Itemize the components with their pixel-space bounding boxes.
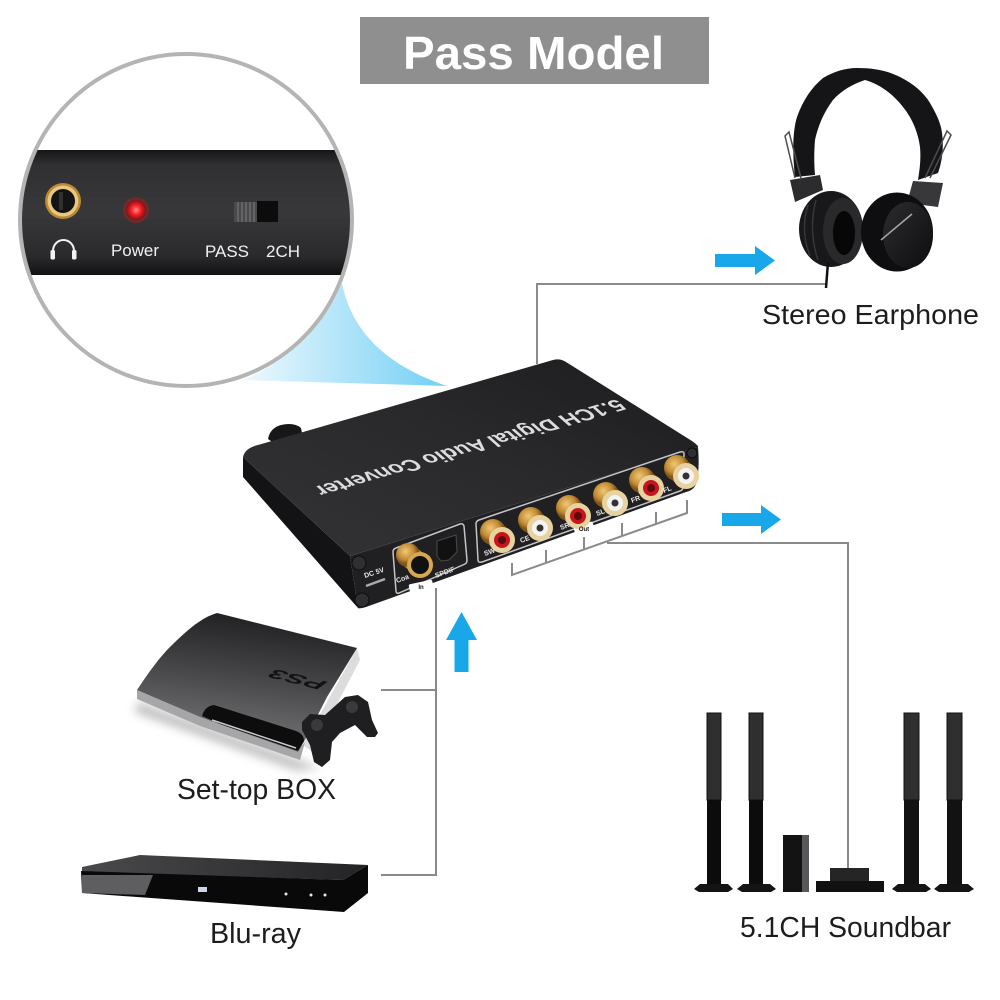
tower speaker 1	[694, 713, 733, 892]
magnified metal band	[22, 150, 350, 275]
label: Power: Power	[111, 242, 160, 260]
callout ring	[20, 54, 352, 386]
label: Set-top BOX: Set-top BOX	[177, 774, 336, 806]
console slot highlight	[212, 720, 296, 748]
device left side	[243, 457, 358, 608]
port labels	[363, 485, 673, 591]
RCA jack SL	[593, 482, 628, 516]
volume knob	[268, 424, 303, 446]
player status dots	[198, 887, 326, 896]
player front	[81, 865, 368, 912]
center speaker	[830, 868, 869, 882]
device front panel	[350, 447, 699, 608]
tower speaker 3	[892, 713, 931, 892]
DC socket	[366, 579, 385, 586]
console top	[137, 613, 357, 752]
title banner	[360, 17, 709, 84]
panel screws	[352, 448, 697, 607]
port labels: SPDIF	[434, 566, 457, 580]
player top	[82, 855, 368, 880]
blue magnifier cone	[243, 283, 447, 386]
right ear cup	[861, 192, 933, 272]
right hinge block	[907, 181, 943, 207]
pass/2CH switch	[234, 201, 278, 222]
label: Blu-ray: Blu-ray	[210, 918, 301, 950]
label: Stereo Earphone: Stereo Earphone	[762, 299, 979, 330]
receiver	[816, 881, 884, 892]
RCA jack FR	[629, 467, 664, 501]
console front lip	[137, 690, 305, 760]
port labels: FR	[630, 495, 641, 505]
headphones	[785, 68, 951, 288]
connector: converter to earphone	[537, 284, 826, 364]
converter device	[243, 359, 699, 608]
audio cable	[826, 262, 828, 288]
speaker set	[694, 713, 974, 892]
slider wires	[785, 131, 951, 178]
RCA jack FL	[664, 455, 699, 489]
output group frame	[476, 452, 684, 562]
title banner: Pass Model	[403, 27, 664, 79]
port labels: SW	[483, 547, 497, 558]
connector: sources to input	[381, 588, 436, 875]
RCA jack SW	[480, 519, 515, 553]
coaxial jack	[396, 543, 433, 578]
PS3 logo: PS3	[266, 665, 331, 692]
label: 2CH: 2CH	[266, 243, 300, 261]
console right edge	[303, 648, 360, 752]
arrow from sources	[446, 612, 477, 672]
label: PASS: PASS	[205, 243, 249, 261]
RCA jack CE	[518, 507, 553, 541]
tower speaker 2	[737, 713, 776, 892]
headphone jack	[45, 183, 81, 219]
port labels: SL	[595, 508, 607, 518]
RCA jack SR	[556, 495, 591, 529]
port labels: FL	[662, 485, 673, 495]
device top face	[243, 359, 698, 556]
controller	[302, 695, 378, 767]
power LED	[123, 197, 149, 223]
label: 5.1CH Soundbar: 5.1CH Soundbar	[740, 912, 951, 944]
magnified panel callout	[0, 54, 372, 386]
subwoofer	[783, 835, 809, 892]
port labels: CE	[519, 535, 531, 545]
arrow to soundbar	[722, 505, 781, 534]
headphone symbol	[50, 240, 76, 260]
port labels: Coa	[395, 574, 410, 585]
disc slot	[202, 705, 304, 751]
port labels: Out	[579, 527, 589, 533]
headband	[793, 68, 943, 180]
arrow to earphone	[715, 246, 775, 275]
tower speaker 4	[934, 713, 974, 892]
port labels: In	[418, 585, 424, 591]
left ear cup	[799, 191, 863, 267]
port labels: DC 5V	[363, 567, 386, 580]
Blu-ray player	[81, 855, 368, 912]
player tray	[82, 875, 153, 895]
port labels: SR	[559, 522, 571, 532]
optical SPDIF port	[437, 535, 457, 561]
game console	[135, 613, 378, 770]
left hinge block	[790, 175, 823, 202]
input group frame	[393, 524, 467, 593]
device name: 5.1CH Digital Audio Converter	[308, 395, 631, 500]
connector: outputs to soundbar	[512, 500, 848, 868]
console shadow	[135, 702, 320, 770]
